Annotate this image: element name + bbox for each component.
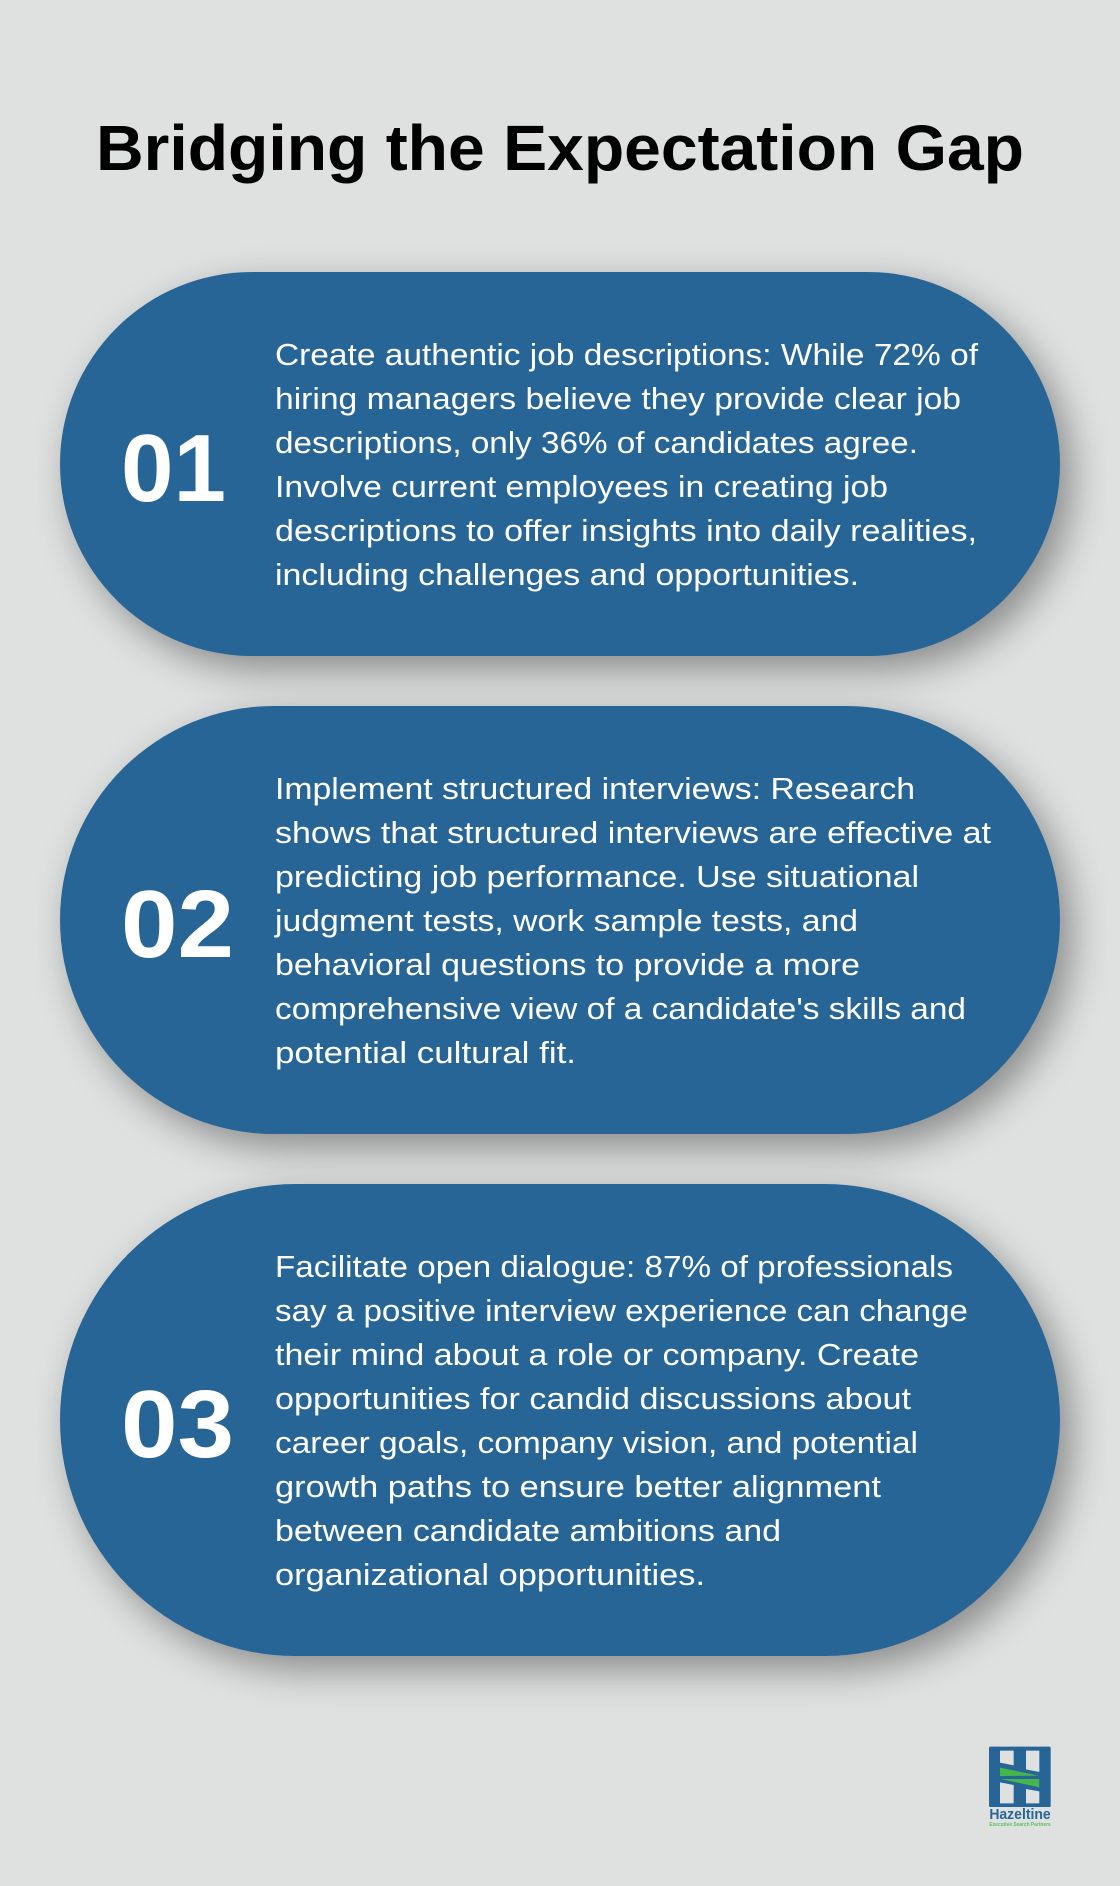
text: structured interviews: judgment tests, work sample tests, and <box>274 903 858 938</box>
text: structured interviews: predicting job performance. Use situational <box>275 859 919 894</box>
text: authentic job descriptions: descriptions to offer insights into daily realities, <box>275 513 977 548</box>
text: structured interviews: behavioral questions to provide a more <box>275 947 860 982</box>
text: open dialogue: opportunities for candid discussions about <box>275 1381 911 1416</box>
text: open dialogue: growth paths to ensure better alignment <box>275 1469 881 1504</box>
text: authentic job descriptions: descriptions, only 36% of candidates agree. <box>275 425 918 460</box>
text: authentic job descriptions: including challenges and opportunities. <box>275 557 859 592</box>
number 03: 03 <box>121 1371 234 1478</box>
number 01: 01 <box>121 415 226 522</box>
text: structured interviews: comprehensive view of a candidate's skills and <box>275 991 966 1026</box>
panel: step 01 <box>60 272 1060 656</box>
text: structured interviews: potential cultural fit. <box>275 1035 576 1070</box>
text: structured interviews: Implement structured interviews: Research <box>275 771 915 806</box>
logo name: Hazeltine <box>989 1807 1051 1823</box>
number 02: 02 <box>121 871 234 978</box>
title: Bridging the Expectation Gap <box>96 112 1024 184</box>
text: structured interviews: shows that structured interviews are effective at <box>275 815 991 850</box>
text: open dialogue: their mind about a role or company. Create <box>275 1337 919 1372</box>
panel: step 02 <box>60 706 1060 1134</box>
text: open dialogue: organizational opportunities. <box>275 1557 705 1592</box>
text: authentic job descriptions: hiring managers believe they provide clear job <box>275 381 961 416</box>
panel: step 03 <box>60 1184 1060 1656</box>
text: open dialogue: career goals, company vision, and potential <box>275 1425 918 1460</box>
text: authentic job descriptions: Involve current employees in creating job <box>275 469 888 504</box>
text: authentic job descriptions <box>275 337 978 592</box>
logo tagline: Executive Search Partners <box>989 1822 1051 1828</box>
text: authentic job descriptions: Create authentic job descriptions: While 72% of <box>275 337 978 372</box>
text: open dialogue <box>275 1249 968 1592</box>
text: open dialogue: between candidate ambitions and <box>275 1513 781 1548</box>
text: open dialogue: Facilitate open dialogue: 87% of professionals <box>275 1249 953 1284</box>
text: structured interviews <box>274 771 991 1070</box>
logo mark <box>989 1747 1051 1807</box>
logo: Hazeltine <box>989 1746 1051 1828</box>
text: open dialogue: say a positive interview experience can change <box>275 1293 968 1328</box>
